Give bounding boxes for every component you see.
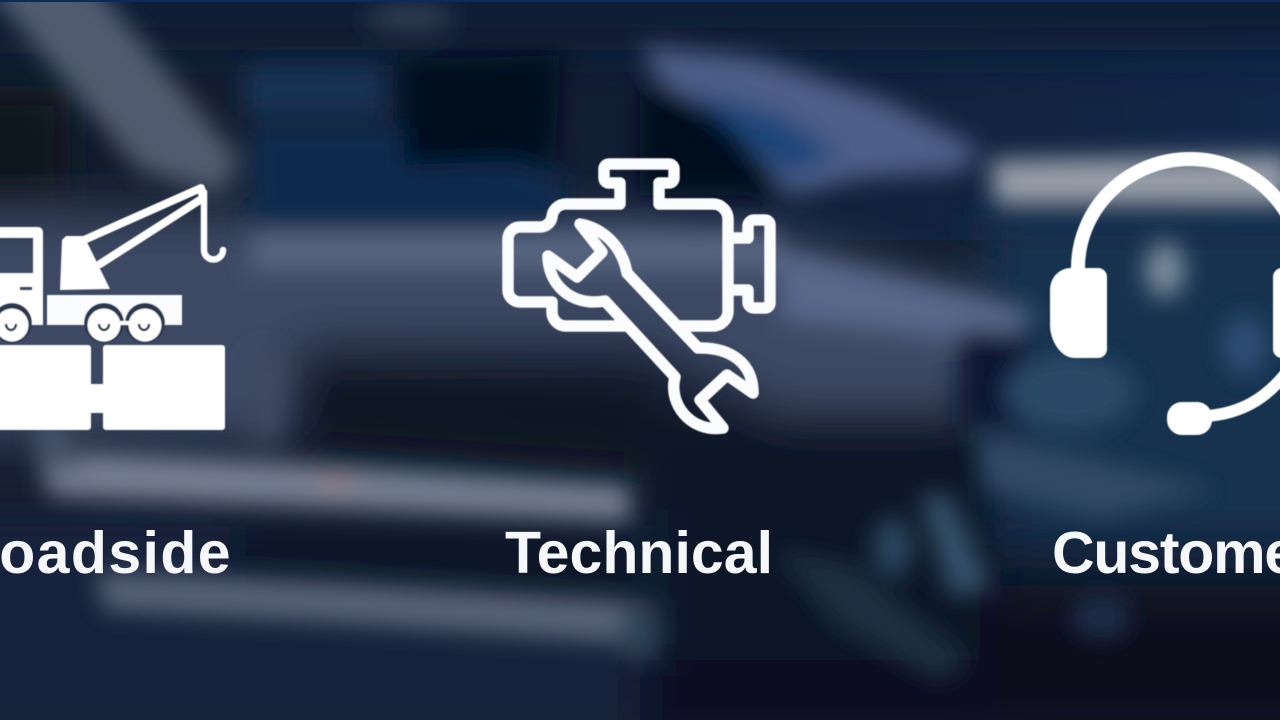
truck cab: [0, 227, 43, 325]
microphone: [1167, 402, 1212, 435]
road blocks: [0, 345, 225, 430]
truck bed: [47, 295, 182, 325]
label: Technical: Technical: [505, 520, 773, 586]
top edge strip: [0, 0, 1280, 2]
icon: headset: [1050, 159, 1280, 435]
wrench outline: [548, 224, 753, 429]
icon: tow truck on road: [0, 188, 225, 430]
headband: [1078, 159, 1280, 275]
crane hook: [204, 192, 223, 260]
crane base: [60, 236, 110, 290]
crane boom: [84, 188, 203, 264]
left ear pad: [1050, 268, 1107, 358]
right ear pad: [1273, 268, 1280, 358]
wheel arches and wheels: [0, 303, 165, 343]
microphone boom: [1208, 372, 1280, 416]
engine outline: [508, 164, 770, 326]
icon: engine with wrench: [508, 164, 770, 429]
